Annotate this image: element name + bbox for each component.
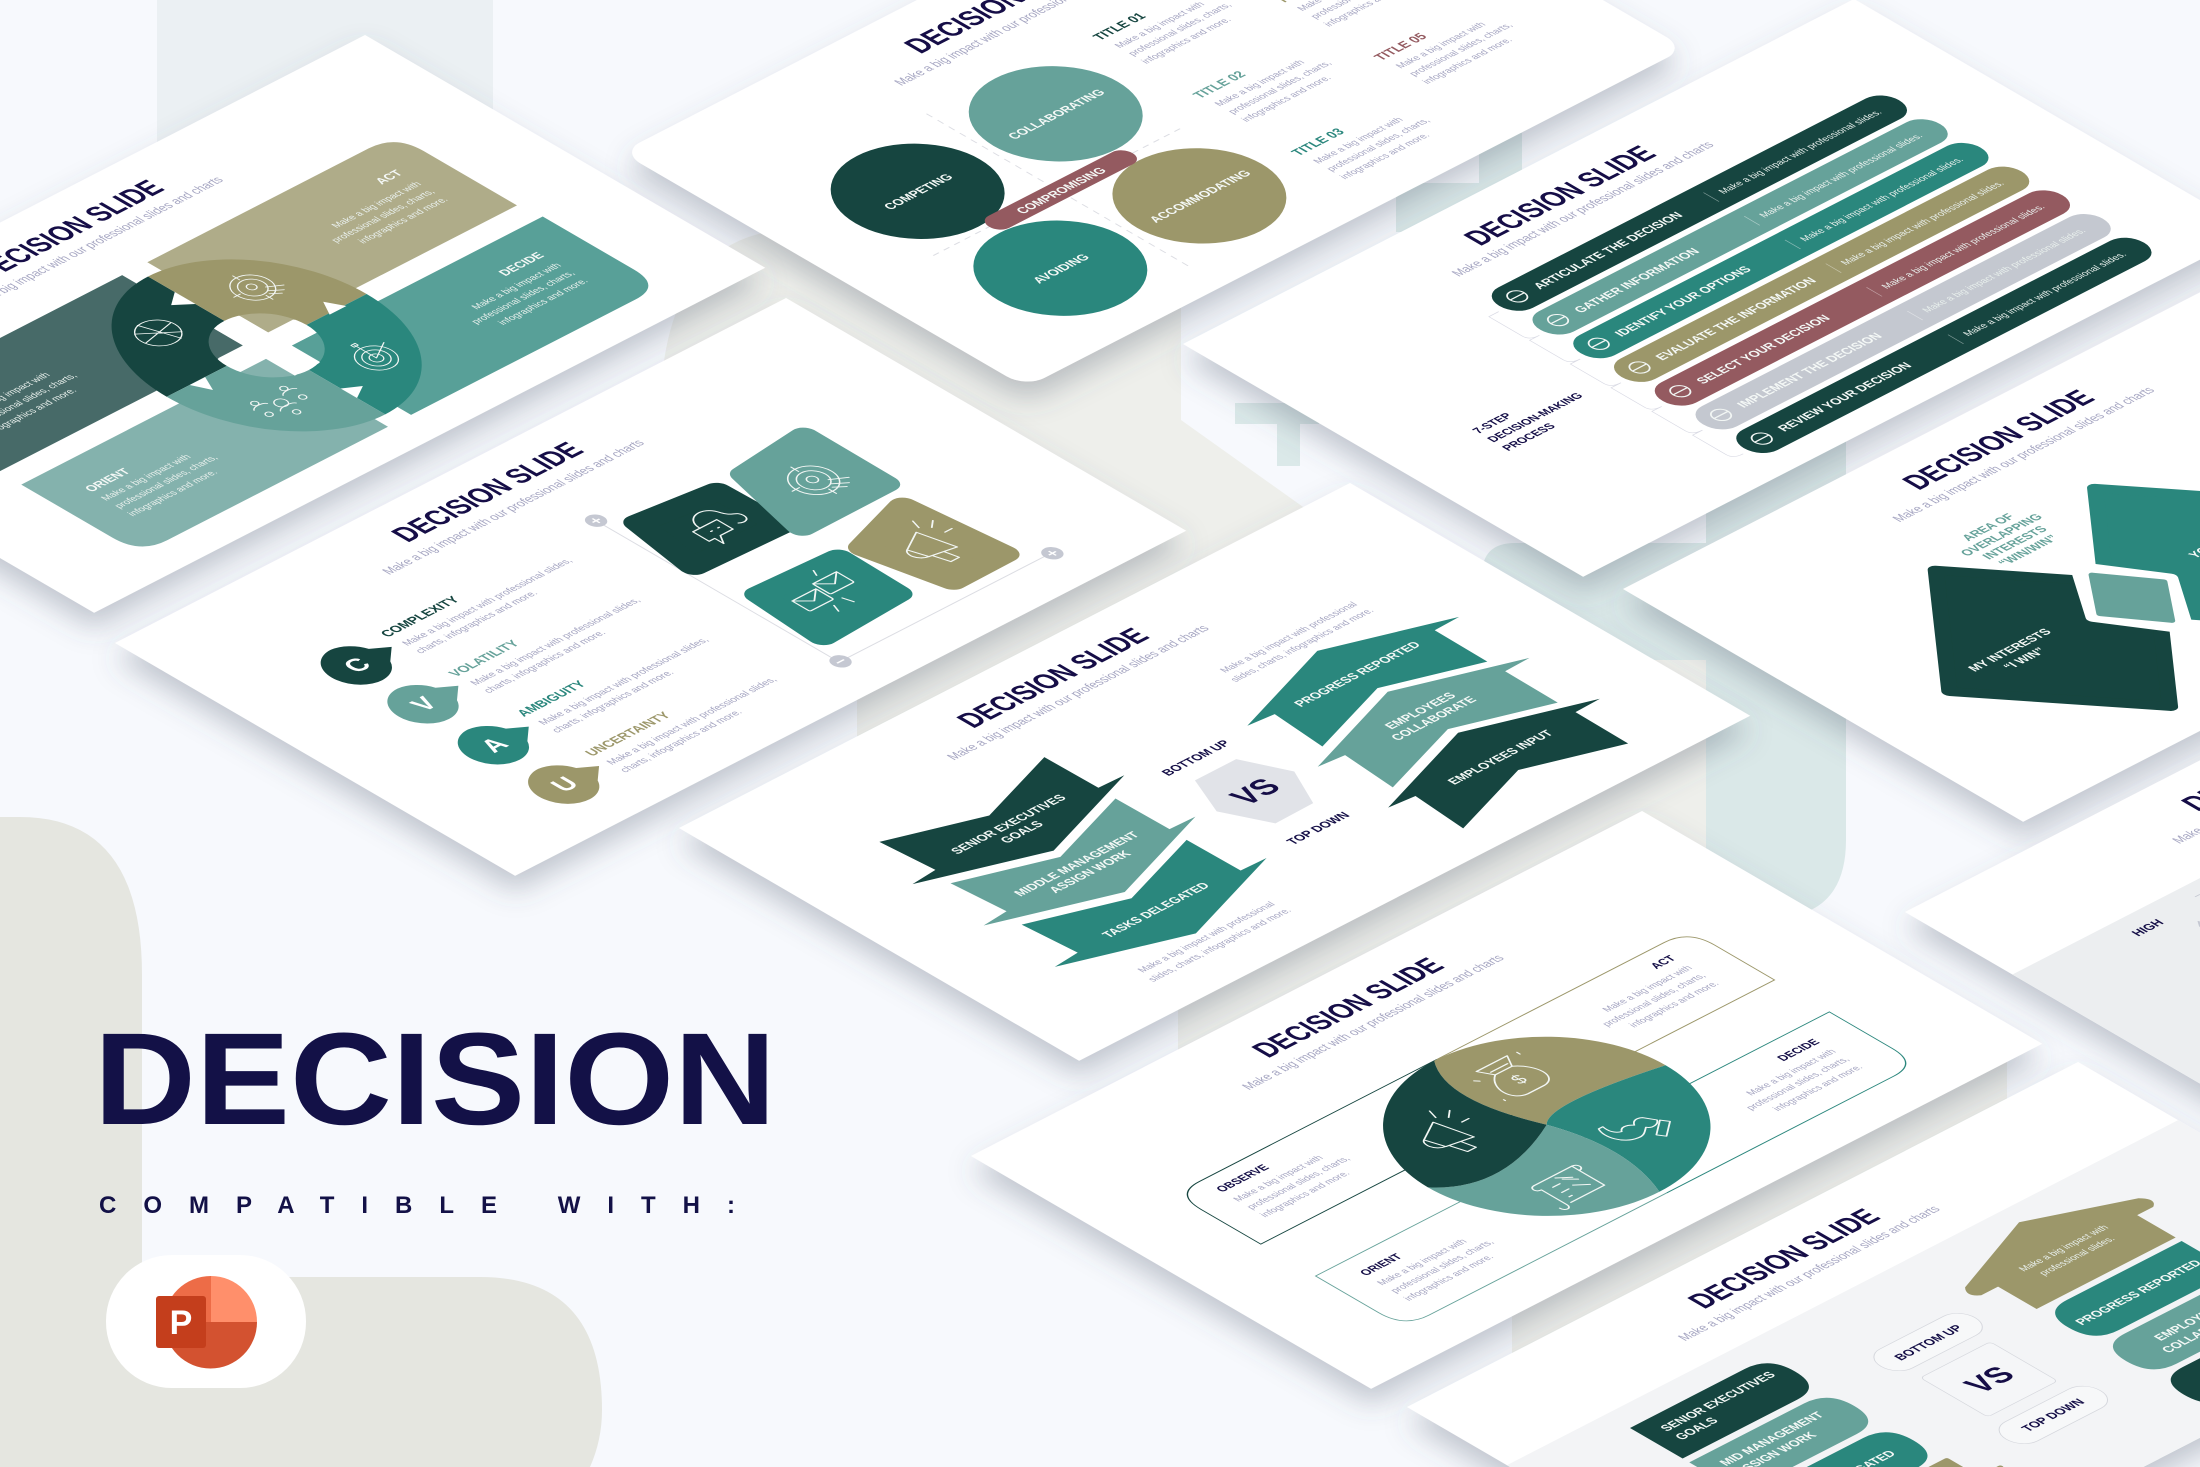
white centre cross: [190, 303, 345, 389]
icon: compass: [125, 315, 192, 351]
panel: outlined pie slide: DECISION SLIDE: [1245, 954, 1452, 1062]
pie segment: mid teal: [1426, 1119, 1672, 1253]
text block: title 05: infographics and more.: [1420, 36, 1516, 86]
background: beige block bottom left: [0, 817, 602, 1467]
panel: top-down vs bottom-up chevron slide: DECISION SLIDE: [950, 624, 1157, 732]
note: bottom up: Make a big impact with professional: [1218, 601, 1361, 675]
title: DECISION: DECISION: [94, 1005, 776, 1152]
item: volatility: [373, 581, 659, 732]
chevron: senior executives: GOALS: [997, 819, 1047, 845]
block: orient: infographics and more.: [126, 468, 221, 518]
background: pale teal shape top: [1396, 133, 1522, 232]
bar: review: [1727, 232, 2161, 458]
bar: identify: Make a big impact with professional slides.: [1798, 156, 1967, 243]
box: observe: Make a big impact with: [1231, 1154, 1326, 1204]
oval: accommodating: [1076, 129, 1322, 263]
shape: overlap area: [2061, 559, 2200, 637]
oval: competing: COMPETING: [880, 172, 957, 212]
chevron: progress reported: [1212, 596, 1513, 757]
item: complexity: charts, infographics and more.: [414, 589, 541, 655]
bar: evaluate: [1604, 161, 2039, 387]
text block: title 01: professional slides, charts,: [1126, 1, 1235, 58]
marker signs: [589, 407, 1060, 666]
text block: title 02: [1189, 40, 1348, 125]
tile: target: [720, 436, 886, 527]
item: ambiguity: AMBIGUITY: [513, 678, 590, 719]
box: observe: OBSERVE: [1214, 1163, 1273, 1194]
block: orient: ORIENT: [81, 466, 134, 494]
block: act: infographics and more.: [356, 196, 451, 245]
oval: collaborating: [933, 47, 1179, 181]
bar: gather: Make a big impact with professional slides.: [1757, 132, 1926, 220]
pill: compromising: COMPROMISING: [1013, 165, 1110, 216]
ring quadrant: olive: [148, 225, 367, 345]
pill: senior executives: SENIOR EXECUTIVES: [1657, 1370, 1779, 1433]
bar: implement: IMPLEMENT THE DECISION: [1734, 331, 1886, 410]
bar: gather: [1523, 114, 1957, 340]
oval: accommodating: ACCOMMODATING: [1146, 168, 1254, 225]
block: act: professional slides, charts,: [329, 188, 438, 245]
ring quadrant: dark: [48, 276, 267, 397]
background: pale teal plus: [1235, 403, 1319, 466]
subtitle: compatible with: COMPATIBLE WITH:: [99, 1192, 735, 1219]
text block: title 05: [1370, 2, 1529, 88]
label: area of overlapping interests: OVERLAPPING: [1957, 512, 2046, 558]
bar: review: REVIEW YOUR DECISION: [1774, 360, 1915, 433]
text block: title 01: [1089, 0, 1248, 67]
bar: review: Make a big impact with professional slides.: [1961, 251, 2130, 338]
house arrow: upper olive: [1927, 1176, 2197, 1320]
chevron: senior executives: SENIOR EXECUTIVES: [947, 793, 1070, 856]
panel: partial high-low slide: [1905, 567, 2200, 1145]
label: area of overlapping interests: “WIN/WIN”: [1995, 533, 2062, 568]
item: uncertainty: charts, infographics and more.: [618, 708, 745, 774]
block: orient: [21, 357, 388, 554]
box: observe: [1175, 1059, 1523, 1244]
bar: gather: GATHER INFORMATION: [1571, 246, 1703, 315]
block: act: ACT: [372, 168, 406, 186]
text block: title 02: TITLE 02: [1189, 69, 1249, 101]
text block: title 05: professional slides, charts,: [1407, 22, 1516, 78]
badge: bottom up: BOTTOM UP: [1891, 1323, 1966, 1363]
panel: top-down vs bottom-up chevron slide: [679, 483, 1750, 1061]
item: volatility: V: [405, 693, 444, 715]
panel: slide with OODA cross ring: [0, 35, 765, 613]
item: ambiguity: A: [474, 734, 515, 757]
bar: evaluate: Make a big impact with professional slides.: [1839, 180, 2007, 267]
markers: [580, 403, 1068, 671]
item: complexity: C: [337, 654, 378, 677]
chevron: employees input: EMPLOYEES INPUT: [1444, 728, 1557, 787]
house arrow: upper olive: professional slides.: [2037, 1235, 2118, 1277]
background: beige band behind slides: [660, 229, 2007, 1467]
oval: collaborating: COLLABORATING: [1005, 87, 1108, 141]
text block: title 03: Make a big impact with: [1311, 116, 1406, 166]
bar: implement: Make a big impact with professional slides.: [1920, 227, 2089, 314]
item: complexity: Make a big impact with professional slides,: [400, 557, 576, 648]
chevron: senior executives: [858, 744, 1160, 905]
text block: title 01: infographics and more.: [1139, 16, 1234, 66]
box: act: infographics and more.: [1627, 980, 1722, 1029]
chevron: progress reported: PROGRESS REPORTED: [1291, 639, 1424, 709]
pie segment: dark: [1315, 1060, 1567, 1199]
note: bottom up: slides, charts, infographics and more.: [1228, 607, 1377, 684]
panel: seven step process slide: [1183, 0, 2200, 577]
chevron: middle management: ASSIGN WORK: [1046, 848, 1135, 895]
bar: articulate: Make a big impact with professional slides.: [1716, 108, 1885, 196]
pill: senior executives: GOALS: [1672, 1415, 1722, 1442]
badge: PowerPoint logo: [106, 1255, 306, 1388]
panel: VUCA slide: [115, 298, 1186, 876]
tile: mail: [755, 556, 903, 637]
chevron: employees collaborate: [1282, 637, 1584, 798]
box: observe: professional slides, charts,: [1245, 1155, 1353, 1211]
label: 7-step: [1471, 383, 1601, 453]
badge: PowerPoint logo: P: [170, 1304, 192, 1342]
box: act: professional slides, charts,: [1600, 972, 1709, 1029]
background: pale block top left: [157, 0, 493, 171]
label: bottom up: BOTTOM UP: [1158, 738, 1234, 778]
box: decide: infographics and more.: [1771, 1063, 1866, 1113]
item: volatility: Make a big impact with professional slides,: [468, 597, 644, 687]
panel: VUCA slide: Make a big impact with our professional slides and charts: [378, 437, 648, 577]
badge: VS hexagon: VS: [1222, 773, 1289, 810]
item: complexity: [306, 542, 592, 693]
panel: win-win overlap slide: DECISION SLIDE: [1895, 386, 2103, 494]
chevron: employees input: [1353, 678, 1654, 839]
box: orient: infographics and more.: [1402, 1253, 1497, 1303]
background: pale teal block right: [1482, 430, 1846, 918]
icon: megaphone: [1397, 1104, 1498, 1160]
block: orient: Make a big impact with: [99, 453, 194, 503]
block: decide: Make a big impact with: [469, 262, 565, 311]
badge: top down: [1990, 1381, 2117, 1449]
bar: identify: IDENTIFY YOUR OPTIONS: [1611, 264, 1755, 339]
pill: mid management: [1689, 1391, 1881, 1467]
panel: win-win overlap slide: Make a big impact with our professional slides and charts: [1889, 384, 2158, 524]
box: act: ACT: [1648, 954, 1679, 971]
icon: money bag: [1465, 1051, 1560, 1103]
tile: megaphone: [844, 501, 1005, 590]
label: high: HIGH: [2128, 917, 2167, 938]
text block: title 02: professional slides, charts,: [1226, 59, 1335, 116]
house arrow: lower olive: [1787, 1449, 2052, 1467]
note: top down: slides, charts, infographics and more.: [1146, 907, 1295, 984]
oval: avoiding: [937, 201, 1183, 336]
pill: mid management: MID MANAGEMENT: [1716, 1410, 1828, 1467]
pie segment: olive: [1419, 1000, 1666, 1134]
note: top down: Make a big impact with professional: [1136, 900, 1278, 974]
bar: select: [1645, 185, 2080, 411]
bar: identify: [1564, 138, 1998, 363]
tile: chat: [628, 486, 779, 568]
panel: slide with conflict ovals: [621, 0, 1686, 387]
panel: pills and house slide: DECISION SLIDE: [1681, 1205, 1888, 1313]
box: act: [1437, 930, 1775, 1109]
item: volatility: VOLATILITY: [445, 638, 523, 679]
item: uncertainty: Make a big impact with professional slides,: [605, 676, 780, 767]
arrow markers: [98, 252, 435, 438]
badge: bottom up: [1865, 1308, 1992, 1376]
chevron: employees collaborate: COLLABORATE: [1388, 694, 1480, 743]
panel: outlined pie slide: [971, 811, 2042, 1389]
box: orient: professional slides, charts,: [1388, 1238, 1497, 1295]
block: act: Make a big impact with: [329, 180, 425, 230]
bar: select: SELECT YOUR DECISION: [1693, 313, 1834, 386]
pill: employees input: [2158, 1308, 2200, 1410]
icon: dartboard: [338, 335, 411, 375]
bracket lines: [596, 411, 1052, 662]
panel: VUCA slide: DECISION SLIDE: [384, 438, 592, 547]
text block: title 03: professional slides, charts,: [1324, 117, 1433, 173]
dashed guide: [2195, 832, 2200, 897]
label: 7-step: DECISION-MAKING: [1485, 392, 1586, 444]
shape: my interests: [1832, 517, 2200, 760]
chevron: middle management: MIDDLE MANAGEMENT: [1011, 829, 1143, 898]
item: ambiguity: [443, 622, 729, 772]
badge: VS: VS: [1956, 1361, 2023, 1398]
item: ambiguity: charts, infographics and more.: [550, 669, 677, 735]
box: orient: ORIENT: [1358, 1252, 1406, 1278]
chevron: middle management: [930, 785, 1231, 946]
bar: articulate: [1482, 90, 1917, 316]
item: uncertainty: U: [545, 773, 586, 796]
item: uncertainty: UNCERTAINTY: [581, 709, 674, 758]
item: complexity: COMPLEXITY: [377, 594, 463, 639]
panel: seven step process slide: DECISION SLIDE: [1457, 142, 1664, 250]
box: decide: professional slides, charts,: [1744, 1056, 1853, 1112]
chevron: tasks delegated: [1001, 827, 1302, 988]
block: orient: professional slides, charts,: [112, 454, 221, 510]
text block: title 03: [1288, 97, 1446, 183]
text block: title 02: infographics and more.: [1239, 74, 1334, 124]
text block: title 01: Make a big impact with: [1113, 0, 1208, 50]
shape: your interests: [1992, 435, 2200, 678]
text block: title 03: infographics and more.: [1338, 131, 1433, 181]
chevron: tasks delegated: TASKS DELEGATED: [1099, 880, 1213, 940]
white gap around overlap: [2037, 545, 2200, 650]
pie segment: teal: [1536, 1059, 1778, 1192]
text block: title 04: [1272, 0, 1430, 30]
icon: scroll: [1527, 1164, 1613, 1211]
pill: tasks delegated: [1749, 1425, 1940, 1467]
connector brackets: [1489, 312, 1743, 459]
badge: VS: [1920, 1342, 2058, 1417]
bar: articulate: ARTICULATE THE DECISION: [1530, 210, 1686, 291]
panel: win-win overlap slide: [1623, 244, 2200, 822]
bar: implement: [1686, 209, 2120, 435]
box: decide: [1578, 1012, 1918, 1193]
badge: VS hexagon: [1178, 749, 1333, 834]
ring quadrant: teal: [267, 294, 485, 414]
item: volatility: charts, infographics and more.: [482, 629, 609, 695]
block: decide: professional slides, charts,: [469, 269, 578, 326]
panel: top-down vs bottom-up chevron slide: Make a big impact with our professional slides and charts: [943, 622, 1213, 762]
bar: evaluate: EVALUATE THE INFORMATION: [1652, 275, 1820, 362]
box: orient: [1316, 1141, 1667, 1328]
block: decide: DECIDE: [495, 250, 548, 278]
icon: target: [214, 266, 292, 309]
oval: competing: [795, 124, 1041, 259]
panel: pills and house slide: [1407, 1062, 2200, 1467]
oval: avoiding: AVOIDING: [1029, 252, 1093, 285]
pill: employees collaborate: [2100, 1275, 2200, 1376]
label: top down: TOP DOWN: [1283, 810, 1353, 847]
label: 7-step: PROCESS: [1500, 422, 1559, 453]
pill: compromising: [979, 147, 1143, 233]
text block: title 01: TITLE 01: [1089, 11, 1149, 42]
box: decide: DECIDE: [1775, 1038, 1823, 1063]
label: 7-step: 7-STEP: [1471, 412, 1516, 436]
bar: select: Make a big impact with professional slides.: [1879, 203, 2048, 291]
house arrow: upper olive: Make a big impact with: [2017, 1224, 2112, 1273]
panel: seven step process slide: Make a big impact with our professional slides and charts: [1448, 139, 1718, 278]
shape: my interests: “I WIN”: [2000, 646, 2049, 672]
item: ambiguity: Make a big impact with professional slides,: [537, 636, 712, 727]
badge: top down: TOP DOWN: [2018, 1397, 2088, 1434]
label: area of overlapping interests: INTERESTS: [1979, 524, 2051, 562]
block: observe: [0, 275, 244, 472]
pill: progress reported: [2043, 1241, 2200, 1343]
chevron: employees collaborate: EMPLOYEES: [1381, 690, 1459, 731]
ring quadrant: mid teal: [167, 345, 385, 466]
icon: team: [245, 383, 321, 425]
block: decide: infographics and more.: [496, 277, 591, 327]
pill: senior executives: [1630, 1356, 1822, 1459]
panel: pills and house slide: Make a big impact with our professional slides and charts: [1674, 1203, 1944, 1343]
panel: outlined pie slide: Make a big impact with our professional slides and charts: [1238, 952, 1508, 1092]
text block: title 05: TITLE 05: [1370, 31, 1430, 63]
block: act: [147, 135, 517, 333]
text block: title 05: Make a big impact with: [1394, 21, 1489, 70]
box: decide: Make a big impact with: [1744, 1048, 1839, 1097]
shape: my interests: MY INTERESTS: [1965, 627, 2055, 674]
text block: title 03: TITLE 03: [1288, 126, 1348, 158]
box: orient: Make a big impact with: [1375, 1238, 1470, 1287]
text block: title 02: Make a big impact with: [1213, 59, 1308, 108]
block: decide: [292, 216, 662, 415]
axis arrow: [2193, 913, 2200, 928]
box: act: Make a big impact with: [1600, 964, 1695, 1014]
box: observe: infographics and more.: [1258, 1170, 1353, 1219]
label: area of overlapping interests: AREA OF: [1959, 511, 2018, 543]
item: uncertainty: [513, 662, 798, 812]
label: area of overlapping interests: [1944, 504, 2073, 574]
icon: handshake: [1596, 1106, 1682, 1152]
